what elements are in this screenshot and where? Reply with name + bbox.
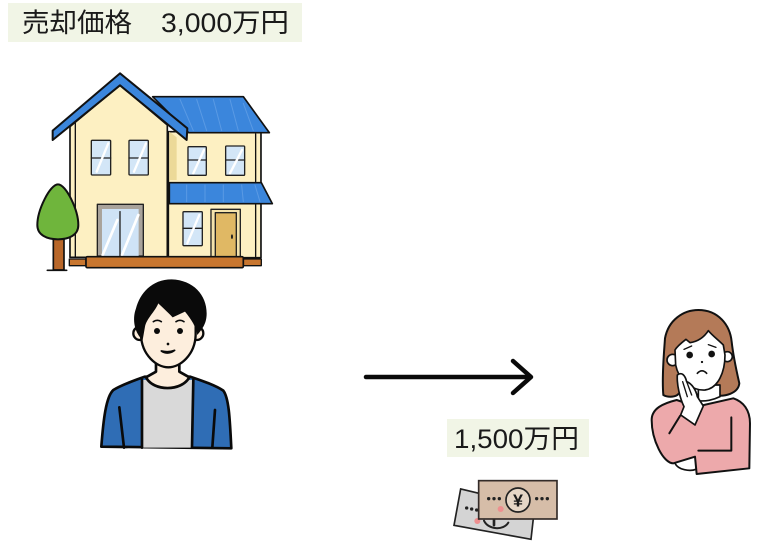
icon: banknotes [454, 481, 557, 539]
face [141, 300, 196, 367]
hair [134, 279, 207, 340]
icon: man in blue cardigan [101, 279, 231, 448]
ears and face [667, 354, 678, 366]
icon: worried woman [652, 310, 750, 474]
neck [146, 360, 189, 388]
wall shadow [169, 132, 177, 180]
sale price label: 3,000万円 [161, 8, 289, 38]
lower window [183, 212, 202, 246]
amount label [447, 419, 589, 457]
upper left windows [91, 140, 148, 175]
amount label: 1,500万円 [454, 424, 579, 454]
cardigan [101, 377, 231, 448]
face details [154, 328, 160, 334]
door [211, 209, 240, 257]
upper right roof [153, 97, 269, 133]
right wall trim [254, 134, 258, 257]
upper right windows [188, 146, 245, 175]
icon: banknotes: ¥ [513, 490, 523, 510]
face details [686, 352, 693, 358]
sale price label [8, 3, 302, 42]
hand and cuff [677, 374, 703, 425]
ears [133, 327, 147, 340]
hair back [663, 310, 739, 397]
front note [479, 481, 557, 519]
back note [454, 489, 535, 539]
foundation [69, 259, 86, 266]
sweater [652, 398, 750, 474]
sale price label: 売却価格 [22, 8, 132, 38]
icon: house with tree [37, 73, 272, 270]
main wall [70, 85, 167, 257]
arrow [366, 361, 531, 393]
right wing wall [168, 132, 261, 258]
main roof [53, 73, 187, 140]
tree [53, 237, 64, 270]
patio door [97, 204, 143, 256]
neck [698, 385, 720, 401]
lower right roof [169, 183, 272, 204]
grey shirt [142, 380, 193, 448]
